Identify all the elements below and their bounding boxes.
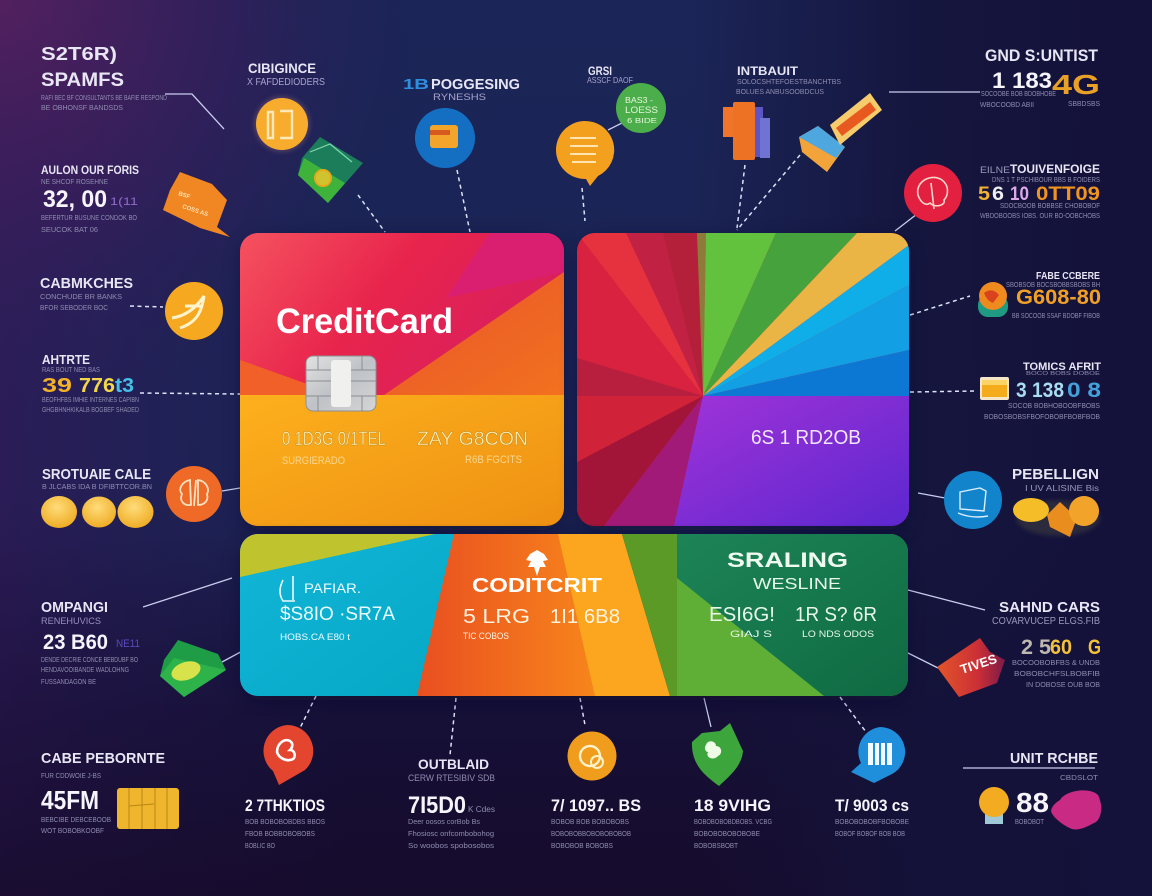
callout: sand cards: BOCOOBOBFBS & UNDB [1012, 658, 1100, 667]
callout: top up exchange: 5 [978, 184, 990, 205]
callout: topics: 3 138 [1016, 379, 1064, 402]
icon: yellow ring circle [568, 732, 616, 780]
callout: saving column: BOBOBOBOBDBOBS. VCBG [694, 817, 772, 826]
callout: topics: TOMICS AFRIT [1023, 361, 1101, 373]
icon: gold chip [117, 788, 179, 829]
callout: top right [980, 46, 1100, 109]
callout: company: FUSSANDAGON BE [41, 677, 96, 686]
callout: outbuild: OUTBLAID [418, 756, 489, 772]
callout: rewards column: T/ 9003 cs [835, 796, 909, 815]
callout: processing: RYNESHS [433, 92, 486, 102]
callout: rates: RAS BOUT NED BAS [42, 365, 100, 374]
callout: origin: X FAFDEDIODERS [247, 77, 325, 88]
icon: yellow circle cashback [165, 282, 223, 340]
callout: outbuild: 7I5D0 [408, 792, 466, 819]
icon: yellow bulb [979, 787, 1009, 824]
icon: crimson circle [904, 164, 962, 222]
callout: top right: GND S:UNTIST [985, 46, 1099, 65]
icon: orange speech tag: COSS AS [181, 204, 209, 218]
callout: face score: G608-80 [1016, 286, 1101, 309]
callout: amount: 32, 00 [43, 186, 107, 213]
callout: card fee: WOT BOBOBKOOBF [41, 826, 104, 835]
callout: transaction: 2 7THKTIOS [245, 796, 325, 815]
icon: green circle [616, 83, 666, 133]
callout: saving column: BOBOBSBOBT [694, 841, 738, 850]
icon: red pin [263, 725, 313, 785]
callout: card fee: BEBCIBE DEBCEBOOB [41, 815, 111, 824]
callout: amount: BEFERTUR BUSUNE CONDOK BO [41, 213, 137, 222]
callout: storage: B JLCABS IDA B DFIBTTCOR.BN [42, 482, 152, 491]
callout: inbuilt: INTBAUIT [737, 64, 799, 78]
callout: top up exchange: SDOCBOOB BOBBSE CHOBOBOF [1000, 201, 1100, 210]
callout: billing [1012, 466, 1099, 493]
icon: orange and purple bars [723, 102, 770, 160]
callout: gast [587, 64, 633, 85]
callout: company: RENEHUVICS [41, 616, 101, 626]
callout: processing: 1B [403, 76, 429, 93]
icon: orange globe [978, 282, 1008, 317]
middle card section text: 1I1 6B8 [550, 606, 620, 628]
callout: transaction: BOBLIC BO [245, 841, 275, 850]
callout: top up exchange: TOUIVENFOIGE [1010, 162, 1100, 176]
icon: green circle: BAS3 - [625, 96, 653, 105]
callout: saving column [694, 796, 772, 850]
callout: saving column: 18 9VIHG [694, 796, 771, 815]
callout: face score [1006, 271, 1101, 320]
callout: amount: SEUCOK BAT 06 [41, 225, 98, 234]
callout: top up exchange: 6 [992, 184, 1004, 205]
icon: orange speech tag [163, 172, 230, 237]
right card section text: GIAJ S [730, 629, 772, 639]
callout: top up exchange: 0TT09 [1036, 184, 1100, 205]
icon: red tag: TIVES [958, 651, 999, 677]
callout: top right: 1 183 [992, 68, 1052, 93]
icon: coins row [41, 496, 154, 528]
icon: gold blocks [1013, 496, 1100, 537]
callout: topics: BOCO BOBS DOBOE [1026, 371, 1101, 377]
icon: green circle: LOESS [625, 105, 658, 115]
callout: company [41, 599, 140, 686]
callout: cashback: BFOR SEBODER BOC [40, 303, 109, 312]
callout: sand cards: 60 [1050, 636, 1072, 659]
callout: transaction: BOB BOBOBOBDBS BBOS [245, 817, 325, 826]
icon: blue chart pin [851, 727, 905, 783]
callout: unit archive [1010, 750, 1098, 826]
callout: top up exchange: WBDOBOOBS IOBS. OUR BO-OOBCHOBS [980, 211, 1100, 220]
callout: rates: AHTRTE [42, 352, 90, 367]
callout: rates [42, 352, 139, 414]
callout: top left: SPAMFS [41, 70, 124, 91]
callout: fee column: 7/ 1097.. BS [551, 796, 641, 815]
callout: face score: BB SOCOOB SSAF BDOBF FIBOB [1012, 311, 1100, 320]
right card section text: WESLINE [753, 576, 841, 593]
callout: billing: PEBELLIGN [1012, 466, 1099, 483]
callout: rates: t3 [115, 375, 134, 397]
callout: storage [42, 466, 152, 491]
callout: transaction: FBOB BOBBOBOBOBS [245, 829, 315, 838]
panel: wide card [240, 534, 909, 700]
callout: sand cards: 2 5 [1021, 636, 1051, 659]
card number: 6S 1 RD2OB [751, 427, 861, 449]
card title: CreditCard [276, 302, 453, 341]
callout: unit archive: UNIT RCHBE [1010, 750, 1098, 767]
callout: rewards column [835, 796, 909, 838]
callout: transaction [245, 796, 325, 850]
callout: gast: ASSCF DAOF [587, 76, 633, 85]
card number and details: 0 1D3G 0/1TEL [282, 429, 386, 450]
callout: inbuilt [736, 64, 841, 96]
left card section text [280, 576, 395, 642]
callout: company: OMPANGI [41, 599, 108, 616]
callout: fee column: BOBOBOB BOBOBS [551, 841, 613, 850]
callout: sand cards: SAHND CARS [999, 599, 1100, 616]
callout: top left: RAFI BEC BF CONSULTANTS BE BAFIE RESPOND [41, 93, 167, 102]
callout: top left [41, 44, 167, 112]
callout: storage: SROTUAIE CALE [42, 466, 151, 483]
callout: company: HENDAVOOIBANDE WADLOHNG [41, 665, 129, 674]
callout: inbuilt: BOLUES ANBUSOOBDCUS [736, 87, 824, 96]
icon: orange speech circle [556, 121, 614, 186]
middle card section text: CODITCRIT [472, 575, 602, 597]
callout: company: NE11 [116, 638, 140, 650]
right card section text [709, 549, 877, 639]
callout: amount: 1(11 [110, 196, 138, 208]
callout: origin [247, 60, 325, 88]
callout: top up exchange [978, 162, 1100, 220]
card number and details: SURGIERADO [282, 455, 345, 467]
callout: top up exchange: DNS 1 T PSCHIBOUR BBS B FOIDERS [992, 175, 1100, 184]
left card section text: PAFIAR. [304, 580, 361, 596]
callout: card fee: 45FM [41, 785, 99, 815]
callout: top right: 4G [1052, 69, 1100, 100]
callout: top right: SBBDSBS [1068, 99, 1100, 108]
callout: outbuild: Fhosiosc onfcombobohog [408, 829, 494, 838]
callout: face score: FABE CCBERE [1036, 271, 1100, 282]
callout: topics: SOCOB BOBHOBOOBFBOBS [1008, 401, 1100, 410]
callout: amount: NE SHCOF ROSEHNE [41, 177, 108, 186]
icon: orange brain circle [166, 466, 222, 522]
callout: outbuild [408, 756, 495, 850]
right card section text: 1R S? 6R [795, 604, 877, 626]
callout: top left: BE OBHONSF BANDSDS [41, 103, 123, 112]
callout: sand cards [992, 599, 1101, 689]
callout: gast: GRSI [588, 64, 612, 78]
callout: amount [41, 163, 139, 234]
panel: credit card rays [577, 233, 909, 530]
middle card section text: 5 LRG [463, 606, 530, 628]
card number and details: R6B FGCITS [465, 454, 522, 466]
right card section text: LO NDS ODOS [802, 629, 874, 639]
callout: billing: I UV ALISINE Bis [1025, 484, 1099, 493]
callout: rewards column: BOBOF BOBOF BOB BOB [835, 829, 905, 838]
icon: orange speech tag: BSF [177, 191, 191, 201]
right card section text: ESI6G! [709, 604, 775, 626]
icon: blue laptop circle [944, 471, 1002, 529]
callout: rates: GHGBHNHKIKALB BOGBEF SHADED [42, 405, 139, 414]
icon: green money stack [160, 640, 226, 697]
callout: processing: POGGESING [431, 76, 520, 93]
callout: rates: 776 [79, 375, 115, 397]
icon: pink blob [1051, 790, 1101, 829]
callout: sand cards: G [1088, 636, 1101, 659]
callout: unit archive: 88 [1016, 787, 1049, 818]
callout: saving column: BOBOBOBOBOBOBE [694, 829, 760, 838]
icon: blue card circle [415, 108, 475, 168]
left card section text: $S8IO ·SR7A [280, 604, 395, 625]
callout: rates: BEOFHFBS IMHIE INTERNES CAPIBN [42, 395, 139, 404]
callout: unit archive: CBDSLOT [1060, 773, 1098, 782]
callout: sand cards: IN DOBOSE OUB BOB [1026, 680, 1100, 689]
callout: rewards column: BOBOBOBOBFBOBOBE [835, 817, 909, 826]
callout: company: 23 B60 [43, 631, 108, 654]
icon: gold card [980, 377, 1009, 400]
callout: outbuild: CERW RTESIBIV SDB [408, 773, 495, 783]
callout: card fee: CABE PEBORNTE [41, 750, 165, 767]
callout: topics: 0 8 [1067, 379, 1101, 402]
callout: topics [984, 361, 1101, 421]
callout: cashback: CABMKCHES [40, 275, 133, 292]
icon: green shield pin [692, 723, 743, 786]
panel: credit card front [240, 233, 564, 530]
callout: card fee: FUR CDDWOIE J-BS [41, 771, 101, 780]
callout: cashback: CONCHUDE BR BANKS [40, 292, 122, 301]
callout: outbuild: Deer oosos corBob Bs [408, 817, 480, 826]
card number and details [282, 429, 528, 467]
icon: green circle: 6 BIDE [627, 118, 657, 125]
middle card section text: TIC COBOS [463, 631, 509, 641]
callout: amount: AULON OUR FORIS [41, 163, 139, 177]
callout: face score: SBOBSOB BOCSBOBBSBOBS BH [1006, 280, 1100, 289]
middle card section text [463, 550, 620, 641]
callout: top up exchange: EILNE [980, 165, 1010, 175]
left card section text: HOBS.CA E80 t [280, 632, 351, 642]
callout: outbuild: K Cdes [468, 805, 495, 814]
connector lines [130, 92, 1095, 768]
right card section text: SRALING [727, 549, 848, 572]
callout: origin: CIBIGINCE [248, 60, 316, 76]
callout: fee column: BOBOBOBBOBOBOBOBOB [551, 829, 631, 838]
icon: green wallet [298, 137, 363, 203]
callout: sand cards: COVARVUCEP ELGS.FIB [992, 616, 1100, 627]
callout: topics: BOBOSBOBSFBOFOBOBFBOBFBOB [984, 412, 1100, 421]
callout: sand cards: BOBOBCHFSLBOBFIB [1014, 669, 1100, 678]
icon: red tag [937, 638, 1005, 697]
icon: blue box and ticket [799, 93, 882, 172]
callout: processing [403, 76, 520, 102]
callout: card fee [41, 750, 165, 835]
callout: unit archive: BOBOBOT [1015, 817, 1044, 826]
callout: top up exchange: 10 [1010, 184, 1029, 205]
callout: rates: 39 [42, 375, 72, 397]
callout: outbuild: So woobos spobosobos [408, 841, 494, 850]
card number and details: ZAY G8CON [417, 429, 528, 450]
callout: fee column [551, 796, 641, 850]
callout: company: DENDE DECRIE CONCE BEBDUBF BO [41, 655, 138, 664]
callout: fee column: BOBOB BOB BOBOBOBS [551, 817, 629, 826]
callout: top right: SOCOOBE BOB BDOBHOBE [981, 89, 1056, 98]
icon: yellow card circle [254, 96, 310, 152]
callout: inbuilt: SOLOCSHTEFOESTBANCHTBS [737, 77, 841, 86]
icon: chip [306, 356, 376, 411]
callout: top left: S2T6R) [41, 44, 117, 64]
callout: cashback [40, 275, 133, 312]
callout: top right: WBOCOOBD ABII [980, 100, 1034, 109]
